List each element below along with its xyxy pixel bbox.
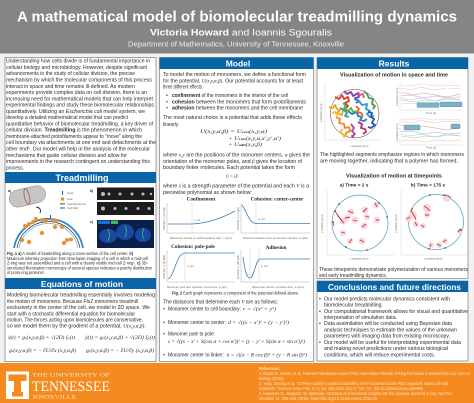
chart: y position over time: y position (μm) [395,124,399,142]
equations text: start with a stochastic differential equation for biomolecular [7,311,135,317]
distance definitions: Monomer center to center: [168,320,226,326]
potential sum text and equation [163,115,302,148]
figure 1 caption: Z-ring was not assembled and a cell with a clearly visible mid-cell Z-ring². c) 3D- [7,261,149,266]
introduction text: cell boundary via attachments at one end and detachments at the [6,140,156,146]
conclusions list: • [319,296,321,302]
distance definitions: The distances that determine each V are as follows: [163,300,278,306]
authors: Victoria Howard and Ioannis Sgouralis [150,28,333,38]
heading: Results: Results [379,58,410,68]
distance definitions: d = √((x − x′)² + (y − y′)²) [228,319,289,326]
equations of motion formulas: gx(x,y,α,β) = − ∂U/∂x (x,y,α,β) [9,347,76,354]
subheading: space and time: Visualization of motion in space and time [340,73,448,79]
equations of motion formulas [7,334,155,354]
results text: are moving together, indicating that a polymer has formed. [320,158,458,164]
potential form text: where λ is a strength parameter of the potential and each V is a [163,184,309,190]
figure 1b: microscopy time-lapse [90,188,154,215]
figure 2 caption: Fig. 2 Each graph represents a component of the potential defined above. [172,290,299,295]
distance definitions: k = √((x − R cos β)² + (y − R sin β)²) [227,352,307,359]
figure 1 caption: of proto-ring proteins³. [7,270,45,275]
equations of motion formulas: ẋ(t) = g x(x,y,α,β) + √(2D) ξ x(t) [7,334,75,341]
legend [60,191,86,210]
figure 1a: cell cartoon and cross-section: a) [8,189,11,193]
subheading: timepoints: Visualization of motion at timepoints [346,173,442,179]
equations text: motion. The forces acting upon biomolecules are conservative, [7,318,143,324]
heading: Model [160,58,314,69]
bullet list of effects: • [166,93,168,99]
introduction text: mechanism by which the molecular components of this process [6,78,152,84]
chart: monomer trajectories in cell: y position (μm) [319,104,323,122]
distance definitions: • [163,320,165,326]
chart: Adhesion: Potential, V_adh (pN) [236,255,240,279]
figure 1 caption: structured illumination microscopy of several species indicates a patchy distribution [7,266,153,270]
introduction text: experimental findings and study these biomolecular relationships [6,103,154,109]
chart: Cohesion pole-pole: s_cut [187,264,194,268]
model intro text: for the potential, U(x,y,α,β). Our potential accounts for at least [163,78,304,84]
chart: time 2 s [320,183,394,260]
conclusions list: biomolecular treadmilling. [324,302,383,308]
FtsZ monomers [20,217,73,245]
panel: left column [5,58,156,362]
title: A mathematical model of biomolecular treadmilling dynamics [17,10,457,26]
equations of motion formulas: gy(x,y,α,β) = − ∂U/∂y (x,y,α,β) [86,347,154,354]
title banner [0,0,474,54]
university wordmark: KNOXVILLE [33,394,77,400]
chart: y position over time: Time (s) [426,146,436,150]
university wordmark [32,372,110,400]
chart: Cohesion pole-pole: Potential, V_pp (pN) [162,255,166,279]
heading: Conclusions: Conclusions and future directions [328,282,461,292]
equations text: so we model them by the gradient of a potential, U(x,y,α,β): [7,323,146,330]
figure 1 caption: Maximum intensity projection from time-lapse imaging of a cell in which a mid-cell [7,256,148,261]
heading: Treadmilling: Treadmilling [55,173,109,183]
bullet list of effects: • [166,100,168,106]
potential form text: where x,y are the positions of the monomer centers, α gives the [163,153,310,159]
results text: The highlighted segments emphasize regions in which monomers [320,152,464,158]
potential sum text and equation: The most natural choice is a potential that adds these effects [163,115,302,121]
chart: Cohesion pole-pole: Cohesion: pole-pole [171,244,216,250]
references: References: [259,366,280,371]
conclusions list: Our model predicts molecular dynamics consistent with [324,296,450,302]
model intro text: To model the motion of monomers, we define a functional form [163,72,307,78]
introduction text [6,59,156,171]
introduction text: improvements in the research contingent on understanding this [6,159,150,165]
heading: Equations of motion [5,278,156,289]
distance definitions: s = √((x − x′ + S(cos α + cos α′))² + (y − y′ + S(sin α + sin α′))²) [168,338,305,345]
chart: Cohesion center-center: Cohesion: center-center [251,197,304,203]
logo: university T [6,372,29,399]
potential form text: orientation of the monomer poles, and β gives the location of [163,159,303,165]
legend: Hook [67,191,74,195]
bullet list of effects: confinement of the monomers in the interior of the cell [172,93,288,99]
equations text: Modeling biomolecular treadmilling essentially involves modeling [7,293,155,299]
references: Biology (2020). [259,376,284,381]
conclusions list [319,296,468,358]
chart: Adhesion: Adhesion [266,245,286,251]
equations of motion formulas: ẏ(t) = g y(x,y,α,β) + √(2D) ξ y(t) [84,334,155,341]
chart: Cohesion center-center: Potential, V_cc (pN) [236,207,240,230]
introduction text: experiments provide complex data on cell division, there is an [6,90,147,96]
figure 1c: structured illumination image: c) [90,220,93,224]
introduction text: quantitative behavior of biomolecular treadmilling, a key driver of [6,121,154,127]
legend: FtsZ [67,197,73,201]
timepoint text: These timepoints demonstrate polymerization of various monomers [319,267,468,273]
chart: Cohesion center-center: Distance between two monomers' centers, d (μm) [243,236,308,240]
bullet list of effects: cohesion between the monomers that form protofilaments [172,100,306,106]
introduction text: advancements in the study of cellular division, the precise [6,71,135,77]
introduction text: cellular biology and microbiology. However, despite significant [6,65,148,71]
conclusions list: • [319,309,321,315]
chart: monomer trajectories in cell [319,83,382,148]
conclusions list: • [319,340,321,346]
cell wall arcs [14,219,83,248]
conclusions list: conditions, which will reduce experimental costs. [324,352,435,358]
conclusions list: and making novel predictions under various biological [324,346,448,352]
references: 2. Yang, Xinxing et al. "GTPase activity-coupled treadmilling of the bacterial tubulin FtsZ organizes septal cell wall [259,381,448,386]
distance definitions: Monomer center to cell boundary: [168,307,241,313]
chart: x position over time: Time (s) [426,111,436,115]
model intro text [163,72,307,91]
references: 3. Haeusser D., Margolin, W. Splitsville: structural and functional insights into the dynamic bacterial Z ring. Nat Rev [259,391,453,396]
chart: Confinement: Monomer center to cell boundary dist., r (μm) [170,236,232,240]
introduction text: increasing need for mathematical models that can help interpret [6,96,154,102]
introduction text: Understanding how cells divide is of fundamental importance in [6,59,150,65]
chart: time 2 s: a) Time = 2 s [340,183,369,189]
figure 1a: cell cartoon and cross-section [7,184,86,248]
affiliation: Department of Mathematics, University of Tennessee, Knoxville [128,42,344,49]
heading: Equations of motion: Equations of motion [41,279,123,289]
equations text: exclusively in the center of the cell, we model in 2D space. We [7,305,150,311]
distance definitions: • [163,307,165,313]
chart: Cohesion pole-pole: Monomer pole dist. between monomers, s (μm) [167,285,227,289]
conclusions list: parameters with imaging data from existing microscopy. [324,334,450,340]
bullet list of effects: adhesion between the monomers and the cell membrane [172,106,303,112]
chart: Adhesion: k_cut [261,264,268,268]
timepoint text: and early treadmilling dynamics. [319,273,387,279]
chart: Confinement: r_cut [194,218,200,222]
chart: time 2 s: x position (μm) [350,256,368,260]
introduction text: cellular division. Treadmilling is the phenomenon in which [6,128,142,134]
chart: Cohesion center-center [236,197,310,240]
panel: Model [160,58,314,362]
potential form text [163,153,310,196]
bullet list of effects: • [166,106,168,112]
potential form text: piecewise polynomial as shown below: [163,190,252,196]
chart: Cohesion pole-pole [162,244,235,289]
references [259,366,471,401]
chart: Adhesion: Monomer center to linker dist., k (μm) [252,285,304,289]
distance definitions: Monomer pole to pole: [168,332,215,338]
chart: Confinement [162,197,235,240]
references: Microbiol 14, 305–319 (2016). https://doi.org/10.1038/nrmicro.2016.26 [259,396,378,401]
conclusions list: analysis techniques to estimate the values of the unknown [324,327,457,333]
potential form text: U = λV [226,174,239,180]
distance definitions [163,300,307,359]
chart: x position over time: x position (μm) [395,88,399,106]
chart: Confinement: Potential, V_con (pN) [162,207,166,230]
university wordmark: THE UNIVERSITY OF [32,372,110,378]
conclusions list: Data assimilation will be conducted using Bayesian data [324,321,452,327]
chart: time 175 s [394,183,468,260]
heading: Model: Model [226,58,250,68]
conclusions list: • [319,321,321,327]
chart: Cohesion center-center: d_cut [258,217,265,221]
introduction text: mechanisms that guide cellular division and allow for [6,153,127,159]
results text [320,152,464,164]
introduction text: membrane-attached protofilaments appear to "move" along the [6,134,142,140]
figure 1 caption: Fig. 1 a) A model of treadmilling along a cross-section of the cell center. b) [7,251,134,256]
chart: Adhesion [236,245,310,289]
potential sum text and equation: U(x,y,α,β) = U con (x,y,α) [200,128,267,135]
heading: Treadmilling [5,172,156,183]
legend: Cell Membrane [67,202,86,206]
distance definitions: • [163,353,165,359]
potential sum text and equation: + U coh (x,y,α,x′,y′,α′) [228,135,281,142]
equations text: the motion of monomers. Because FtsZ monomers treadmill [7,299,138,305]
conclusions list: Our computational framework allows for visual and quantitative [324,309,468,315]
introduction text: interact in space and time remains ill-defined. As modern [6,84,135,90]
figure 1c: structured illumination image [90,220,154,248]
chart: time 2 s: y position (μm) [320,215,324,233]
timepoint text [319,267,468,279]
potential sum text and equation: linearly. [163,122,179,128]
chart: x position over time [395,82,463,115]
potential form text: boundary linker molecules. Each potential takes the form [163,165,296,171]
university wordmark: TENNESSEE [32,379,110,395]
chart: monomer trajectories in cell: x position (μm) [350,144,368,148]
distance definitions: • [163,332,165,338]
potential sum text and equation: + U adh (x,y,β) [228,141,262,148]
references: synthesis." Science (New York, N.Y.) vol. 355,6326 (2017): 744-747. doi:10.1126/science.aak9995 [259,386,424,391]
icon: rod cell [7,184,47,209]
legend: Cell Wall [67,206,78,210]
heading: Results [317,58,468,69]
introduction text: other end¹. Our model will help in the analysis of the molecular [6,146,150,152]
introduction text: develop a detailed mathematical model that can predict [6,115,128,121]
distance definitions: r = √(x² + y²) [243,306,276,313]
chart: time 175 s: y position (μm) [394,215,398,233]
distance definitions: Monomer center to linker: [168,353,224,359]
panel: Results [317,58,468,279]
figure 1b: microscopy time-lapse: b) [90,189,93,193]
introduction text: process. [6,165,24,171]
panel: Conclusions [317,281,468,361]
conclusions list: Our model will be useful for interpretating experimental data [324,340,461,346]
chart: Confinement: Confinement [187,197,216,203]
introduction text: quantitatively. Utilizing an Escherichia coli model system, we [6,109,145,115]
model intro text: three different effects: [163,85,203,91]
footer band [0,363,474,403]
chart: y position over time [395,117,463,150]
chart: time 175 s: x position (μm) [424,256,442,260]
figure 1 caption [7,251,153,275]
chart: time 175 s: b) Time = 175 s [411,183,446,189]
equations text [7,293,155,330]
bullet list of effects [166,93,306,112]
conclusions list: interpretation of simulation data. [324,315,397,321]
